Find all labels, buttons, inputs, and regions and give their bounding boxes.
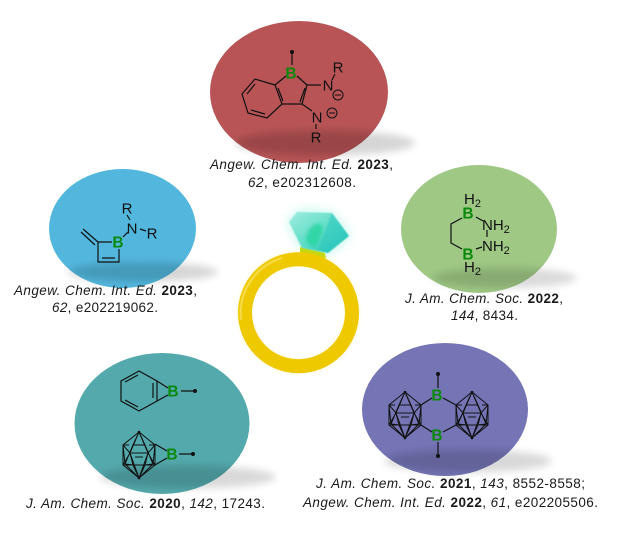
molecule: benzoborole diamide: R bbox=[311, 130, 322, 146]
teal ellipse shadow bbox=[100, 466, 276, 488]
molecule: diborane hydrazine: 2 bbox=[475, 266, 481, 278]
molecule: benzoborole diamide bbox=[242, 50, 344, 146]
molecule: diborane hydrazine: 2 bbox=[475, 198, 481, 210]
molecule: diborane hydrazine: NH bbox=[482, 217, 504, 234]
citation: blue: 62, e202219062. bbox=[52, 300, 158, 315]
molecule: benzoborole diamide: R bbox=[333, 60, 344, 76]
molecule: borete amine: B bbox=[112, 234, 124, 252]
green ellipse bbox=[401, 165, 557, 293]
citation: purple: Angew. Chem. Int. Ed. 2022, 61, e202205506. bbox=[302, 495, 598, 510]
molecule: diborane hydrazine: H bbox=[464, 191, 475, 208]
citation: purple bbox=[302, 476, 598, 510]
panel: green molecule bbox=[401, 165, 577, 323]
molecule: benzoborole diamide: N bbox=[323, 78, 333, 94]
molecule: benzyne borane bbox=[121, 371, 197, 411]
citation: green: J. Am. Chem. Soc. 2022, bbox=[404, 291, 563, 306]
molecule: diborane hydrazine: 2 bbox=[504, 245, 510, 257]
molecule: diborane hydrazine: B bbox=[462, 246, 474, 264]
molecule: diborane hydrazine: B bbox=[462, 206, 474, 222]
citation: red: 62, e202312608. bbox=[248, 175, 356, 190]
molecule: bis-carborane diborin: B bbox=[431, 428, 443, 444]
molecule: carborane borane bbox=[123, 431, 195, 479]
citation: green bbox=[404, 291, 563, 323]
citation: blue bbox=[13, 283, 197, 315]
citation: blue: Angew. Chem. Int. Ed. 2023, bbox=[13, 283, 197, 298]
red ellipse bbox=[210, 21, 388, 163]
blue ellipse bbox=[49, 169, 196, 288]
panel: purple molecule bbox=[302, 343, 598, 510]
molecule: carborane borane: B bbox=[166, 446, 178, 464]
citation: red: Angew. Chem. Int. Ed. 2023, bbox=[209, 157, 393, 172]
panel: blue molecule bbox=[13, 169, 218, 315]
blue ellipse shadow bbox=[68, 262, 218, 282]
molecule: benzoborole diamide: B bbox=[285, 66, 297, 82]
molecule: bis-carborane diborin: B bbox=[431, 388, 443, 404]
citation: purple: J. Am. Chem. Soc. 2021, 143, 8552-8558; bbox=[315, 476, 585, 491]
molecule: diborane hydrazine: H bbox=[464, 259, 475, 276]
molecule: benzyne borane: B bbox=[167, 384, 179, 400]
molecule: diborane hydrazine: NH bbox=[482, 238, 504, 255]
red ellipse shadow bbox=[235, 130, 415, 156]
molecule: diborane hydrazine: 2 bbox=[504, 224, 510, 236]
citation: green: 144, 8434. bbox=[451, 308, 518, 323]
molecule: benzoborole diamide: N bbox=[312, 110, 322, 126]
molecule: diborane hydrazine bbox=[451, 191, 510, 278]
purple ellipse bbox=[362, 343, 528, 476]
panel: red molecule bbox=[209, 21, 415, 190]
citation: teal: J. Am. Chem. Soc. 2020, 142, 17243. bbox=[25, 496, 265, 511]
molecule: bis-carborane diborin bbox=[389, 372, 488, 458]
molecule: borete amine bbox=[81, 200, 158, 262]
icon: gold ring with diamond bbox=[241, 212, 352, 366]
molecule: borete amine: N bbox=[127, 220, 137, 238]
molecule: borete amine: R bbox=[147, 226, 158, 242]
citation: red bbox=[209, 157, 393, 190]
green ellipse shadow bbox=[433, 268, 577, 288]
panel: teal molecules bbox=[25, 353, 276, 511]
molecule: borete amine: R bbox=[122, 200, 133, 218]
teal ellipse bbox=[74, 353, 250, 494]
purple ellipse shadow bbox=[384, 450, 552, 472]
